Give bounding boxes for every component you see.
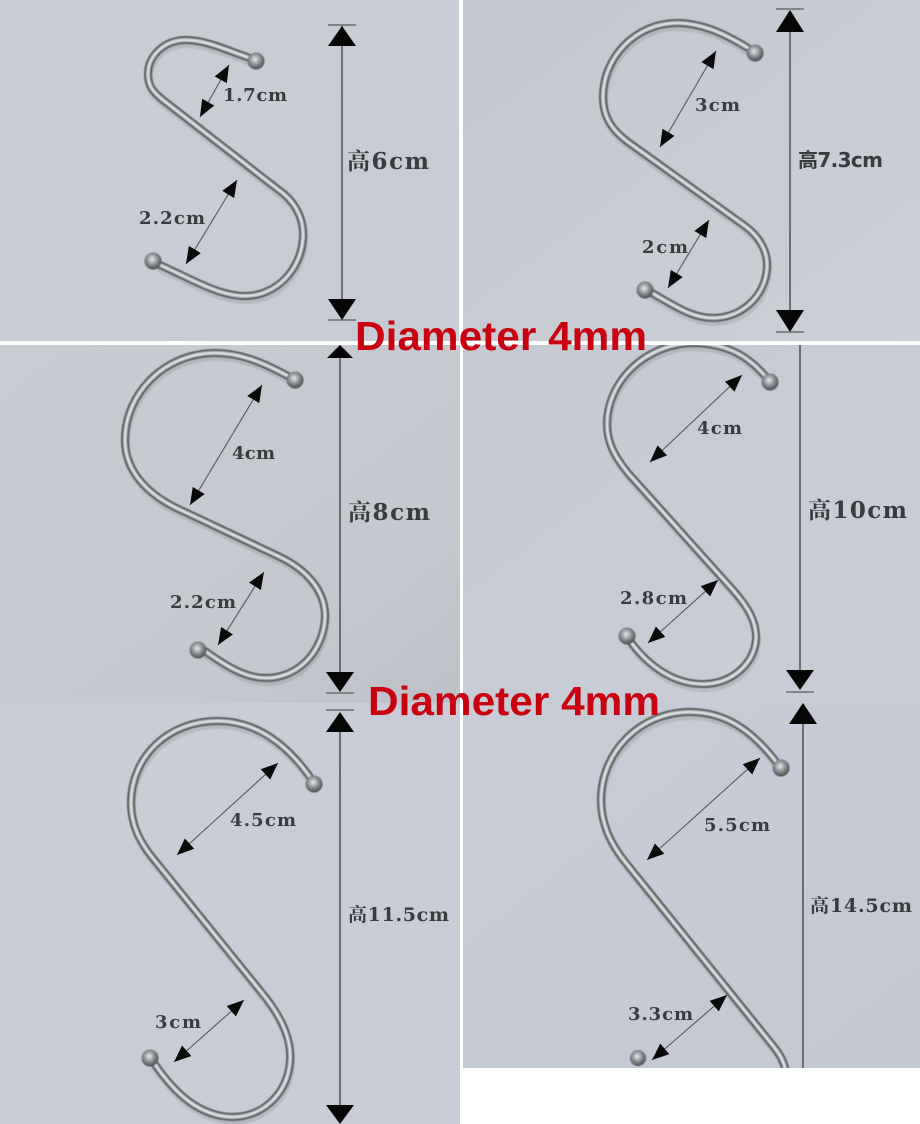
panel: 6cm hook [0, 0, 459, 341]
hook illustration [601, 712, 790, 1079]
gap arrows [660, 51, 716, 288]
gap arrows [174, 763, 278, 1062]
hook illustration [131, 721, 322, 1121]
panel: 8cm hook [0, 345, 460, 703]
gap arrows [186, 65, 237, 264]
hook illustration [144, 40, 304, 300]
panel background [463, 345, 920, 703]
label: height 7.3cm: 高7.3cm [798, 148, 883, 172]
callout: diameter lower: Diameter 4mm [368, 678, 660, 724]
label: 5.5cm: 5.5cm [704, 815, 770, 836]
hook illustration [603, 23, 768, 322]
panel background [463, 703, 920, 1068]
panel background [0, 0, 459, 341]
panel background [0, 703, 460, 1124]
height arrow [786, 345, 814, 692]
label: 3cm: 3cm [695, 95, 740, 116]
height arrow [776, 9, 804, 332]
label: height 14.5cm: 高14.5cm [810, 894, 912, 917]
label: 4cm: 4cm [697, 418, 742, 439]
hook illustration [607, 343, 778, 688]
gap arrows [647, 758, 760, 1060]
height arrow [326, 345, 354, 693]
gap arrows [648, 375, 742, 643]
panel background [0, 345, 460, 703]
label: 2.2cm: 2.2cm [170, 592, 236, 613]
label: 1.7cm: 1.7cm [223, 85, 287, 106]
label: 3cm: 3cm [155, 1012, 201, 1033]
label: 2cm: 2cm [642, 237, 688, 258]
height arrow [328, 25, 356, 320]
label: 2.2cm: 2.2cm [139, 208, 205, 229]
gap arrows [190, 385, 264, 645]
hook illustration [125, 353, 326, 682]
label: 3.3cm: 3.3cm [628, 1004, 693, 1025]
height arrow [789, 703, 817, 1068]
label: 2.8cm: 2.8cm [620, 588, 687, 609]
panel: 7.3cm hook [463, 0, 920, 341]
label: height 11.5cm: 高11.5cm [348, 903, 449, 926]
panel: 11.5cm hook [0, 703, 460, 1124]
panel: 10cm hook [463, 343, 920, 703]
label: height 6cm: 高6cm [347, 148, 429, 175]
label: 4.5cm: 4.5cm [230, 810, 296, 831]
label: height 10cm: 高10cm [808, 497, 907, 524]
label: height 8cm: 高8cm [348, 499, 430, 526]
height arrow [326, 710, 354, 1124]
panel background [463, 0, 920, 341]
panel: 14.5cm hook [463, 703, 920, 1079]
label: 4cm: 4cm [232, 443, 275, 464]
callout: diameter upper: Diameter 4mm [355, 313, 647, 359]
